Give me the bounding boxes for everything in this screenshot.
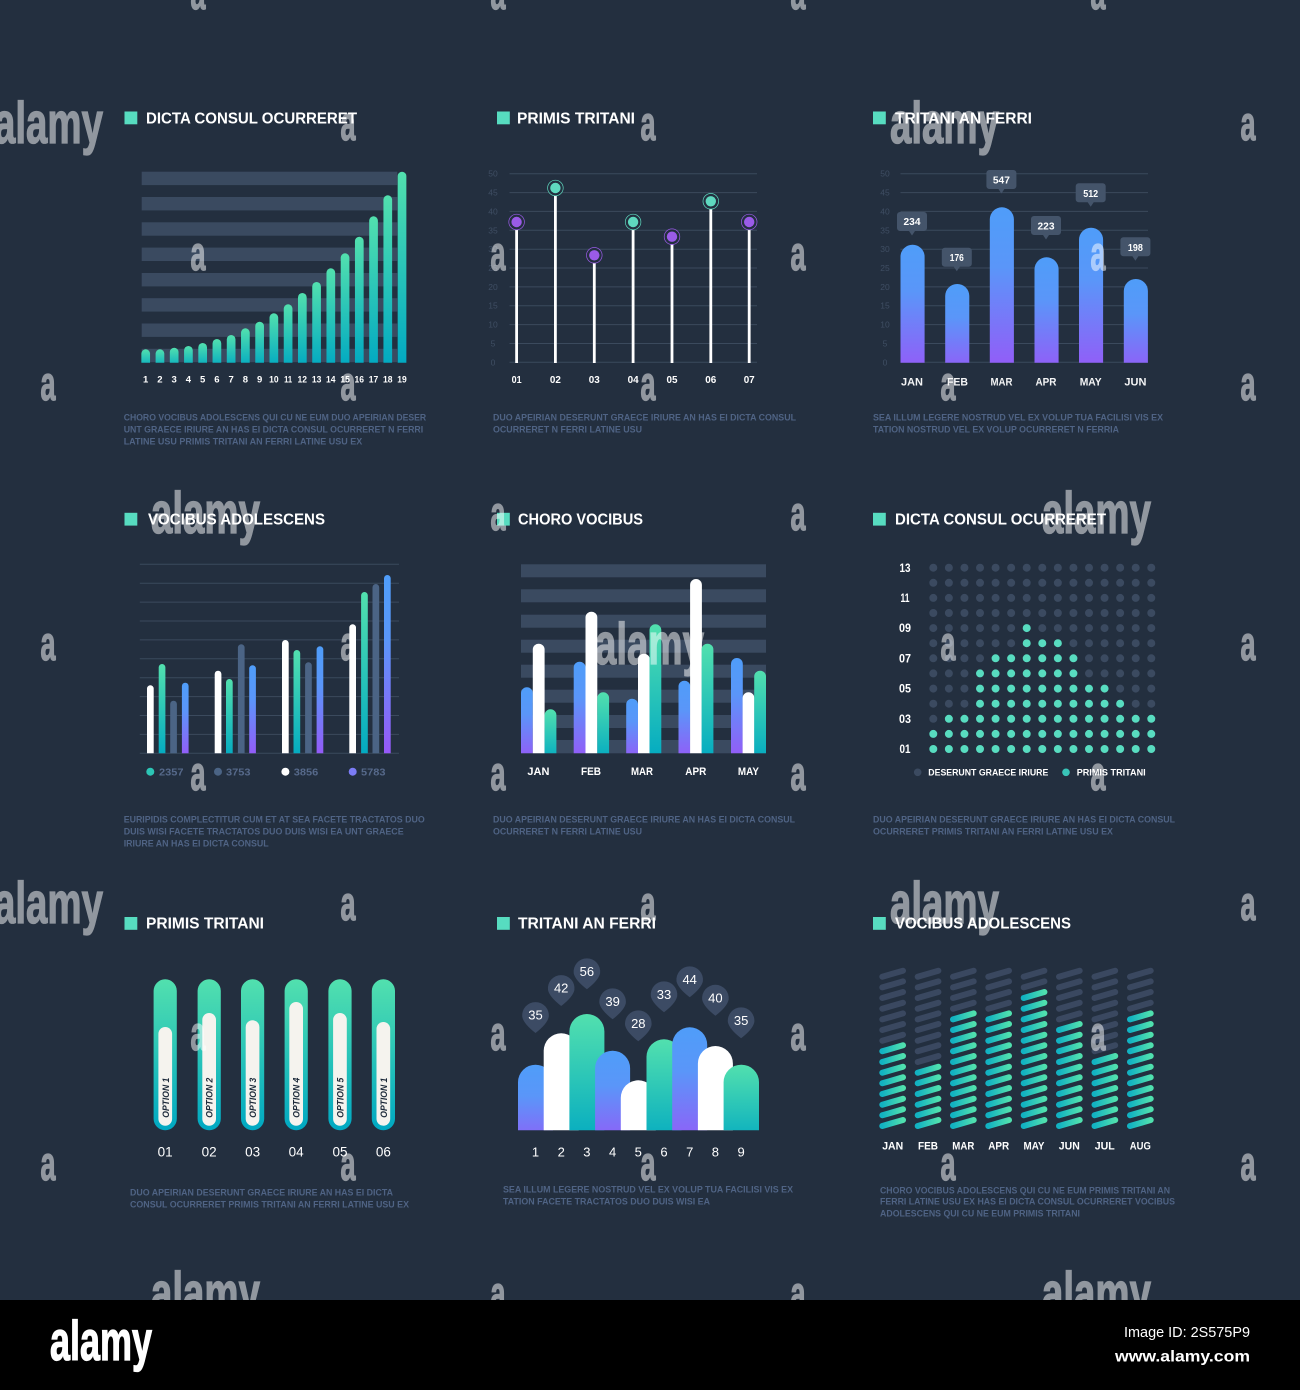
panel: primis tritani lollipop chart [488,110,796,436]
y axis labels: 45 [488,188,498,198]
axis labels: 10 [269,375,279,386]
option labels [161,1077,390,1118]
bar chart [521,579,766,764]
y axis labels: 5 [883,338,888,348]
watermark overlay: a [340,618,356,671]
y axis labels: 10 [880,320,890,330]
month labels: JUN [1059,1141,1080,1153]
watermark overlay: a [1240,878,1256,931]
segment column mar [953,971,974,1126]
y axis labels: 35 [488,225,498,235]
axis labels: 8 [712,1144,719,1159]
grid lines [900,174,1148,362]
watermark overlay: a [490,1008,506,1061]
panel: tritani an ferri overlapping arches [497,916,794,1208]
watermark overlay: a [40,358,56,411]
description: OCURRERET N FERRI LATINE USU [493,424,642,436]
watermark overlay: a [790,228,806,281]
option labels: OPTION 5 [336,1077,346,1118]
y axis labels: 25 [488,263,498,273]
y axis labels: 50 [488,169,498,179]
month labels: FEB [918,1141,938,1153]
option labels: OPTION 1 [379,1078,390,1118]
description: DUO APEIRIAN DESERUNT GRAECE IRIURE AN HAS EI DICTA [130,1188,393,1198]
month labels [882,1141,1151,1153]
month labels: AUG [1130,1141,1151,1153]
description: LATINE USU PRIMIS TRITANI AN FERRI LATINE USU EX [124,436,363,448]
description: EURIPIDIS COMPLECTITUR CUM ET AT SEA FACETE TRACTATOS DUO [124,814,425,826]
watermark overlay: a [940,358,956,411]
watermark overlay: a [340,878,356,931]
axis labels: 02 [202,1144,217,1160]
axis labels: 3 [172,375,177,386]
y axis labels: 15 [488,301,498,311]
y axis labels: 10 [488,320,498,330]
watermark overlay: a [490,1268,506,1321]
description: TATION FACETE TRACTATOS DUO DUIS WISI EA [503,1196,710,1208]
y axis labels: 40 [880,206,890,216]
y axis labels: 40 [488,206,498,216]
pin values: 42 [554,981,568,996]
axis labels: 6 [660,1144,668,1159]
axis labels: 07 [744,374,755,386]
segment column apr [988,971,1009,1126]
month labels: JAN [882,1141,903,1153]
background stripes [142,172,397,362]
description: CONSUL OCURRERET PRIMIS TRITANI AN FERRI LATINE USU EX [130,1200,410,1210]
description: IRIURE AN HAS EI DICTA CONSUL [124,838,269,850]
y axis labels: 30 [488,244,498,254]
axis labels: 5 [635,1144,642,1159]
axis labels: 9 [257,375,262,386]
description [493,412,796,436]
pin values: 39 [605,994,620,1009]
y axis labels: 03 [899,714,911,726]
watermark overlay: a [1240,618,1256,671]
axis labels: 06 [376,1144,391,1160]
bar chart [141,172,406,369]
heading: TRITANI AN FERRI [518,916,656,932]
callout values [904,175,1143,264]
watermark overlay: a [1240,1138,1256,1191]
month labels [527,766,759,778]
panel: tritani an ferri monthly bars [873,110,1164,436]
axis labels: 06 [705,374,716,386]
capsule tracks [154,979,395,1130]
heading: VOCIBUS ADOLESCENS [895,916,1071,932]
y axis labels: 25 [880,263,890,273]
axis labels: 11 [284,375,293,386]
legend marker [873,112,886,124]
description: TATION NOSTRUD VEL EX VOLUP OCURRERET N FERRIA [873,424,1119,436]
callout values: 198 [1128,243,1143,254]
callout values: 234 [904,217,921,228]
description: OCURRERET PRIMIS TRITANI AN FERRI LATINE USU EX [873,826,1114,838]
description [873,814,1175,838]
month labels: MAR [990,377,1013,389]
y axis labels: 13 [900,563,910,575]
axis labels [532,1144,745,1159]
description [873,412,1164,436]
watermark overlay: a [490,488,506,541]
month labels: MAR [631,766,653,778]
axis labels: 8 [243,375,248,386]
panel: vocibus adolescens grouped thin bars [124,512,425,850]
y axis labels: 50 [880,169,890,179]
watermark overlay: a [1240,98,1256,151]
description [493,814,795,838]
axis labels: 17 [369,375,378,386]
legend marker [124,513,137,526]
watermark overlay: a [1240,358,1256,411]
axis labels: 14 [326,375,336,386]
segment column jul [1094,971,1115,1126]
y axis labels [880,169,890,367]
y axis labels: 20 [488,282,498,292]
y axis labels: 11 [900,593,910,605]
axis labels: 16 [355,375,364,386]
axis labels: 02 [550,374,561,386]
axis labels: 13 [312,375,321,386]
watermark overlay: a [640,878,656,931]
month labels: MAY [738,766,759,778]
watermark overlay: a [40,618,56,671]
legend: 3856 [294,766,318,778]
segment column feb [918,971,938,1126]
axis labels: 03 [245,1144,260,1160]
axis labels: 05 [332,1144,348,1160]
legend marker [124,112,137,124]
bar chart [900,207,1148,379]
watermark overlay: a [790,748,806,801]
option labels: OPTION 3 [248,1077,259,1118]
panel: dicta consul ocurreret stepped bars [124,110,426,448]
y axis labels: 45 [880,188,890,198]
watermark overlay: a [1090,228,1106,281]
empty dots [933,568,1152,719]
axis labels: 19 [397,375,407,386]
footer logo: alamy [50,1309,152,1372]
description: UNT GRAECE IRIURE AN HAS EI DICTA CONSUL OCURRERET N FERRI [124,424,423,436]
stems [517,192,749,363]
watermark overlay: a [340,1138,356,1191]
description: DUIS WISI FACETE TRACTATOS DUO DUIS WISI EA UNT GRAECE [124,826,404,838]
axis labels [143,375,407,386]
axis labels: 2 [558,1144,565,1159]
month labels: JAN [527,766,549,778]
watermark overlay: alamy [890,871,999,936]
watermark overlay: a [790,1008,806,1061]
watermark overlay: a [190,228,206,281]
description: DUO APEIRIAN DESERUNT GRAECE IRIURE AN HAS EI DICTA CONSUL [873,814,1175,826]
axis labels: 7 [686,1144,693,1159]
option labels: OPTION 4 [292,1077,302,1118]
heading: PRIMIS TRITANI [517,110,635,127]
grid lines [140,564,399,753]
description: SEA ILLUM LEGERE NOSTRUD VEL EX VOLUP TUA FACILISI VIS EX [873,412,1164,424]
y axis labels: 0 [491,357,496,367]
legend [914,768,1146,779]
watermark overlay: a [490,748,506,801]
panel: primis tritani capsule gauges [124,916,410,1210]
description: DUO APEIRIAN DESERUNT GRAECE IRIURE AN HAS EI DICTA CONSUL [493,412,796,424]
legend marker [124,917,137,930]
watermark overlay: a [490,228,506,281]
axis labels: 05 [666,374,678,386]
legend marker [497,917,510,930]
image id: Image ID: 2S575P9 [1124,1324,1250,1341]
axis labels [512,374,755,386]
month labels: APR [685,766,706,778]
axis labels: 12 [298,375,307,386]
pin values: 44 [682,972,697,987]
segment column jun [1059,971,1080,1126]
month labels: MAY [1080,377,1102,389]
description: FERRI LATINE USU EX HAS EI DICTA CONSUL OCURRERET VOCIBUS [880,1196,1175,1208]
bar chart [147,575,391,761]
capsule fills [158,1002,390,1126]
y axis labels: 35 [880,225,890,235]
legend: 5783 [361,766,386,778]
heading: DICTA CONSUL OCURRERET [146,110,357,127]
option labels: OPTION 2 [204,1077,216,1118]
y axis labels: 30 [880,244,890,254]
y axis labels: 05 [899,684,912,696]
panel: vocibus adolescens slanted segment bars [873,916,1175,1220]
pin values: 35 [734,1013,748,1028]
description: CHORO VOCIBUS ADOLESCENS QUI CU NE EUM PRIMIS TRITANI AN [880,1186,1170,1196]
filled dots [933,628,1152,749]
axis labels: 04 [628,374,639,386]
month labels: FEB [947,377,968,389]
axis labels [158,1144,391,1160]
month labels: MAY [1024,1141,1045,1153]
axis labels: 1 [532,1144,539,1159]
pin values: 56 [580,964,594,979]
pin values: 33 [657,987,671,1002]
axis labels: 18 [383,375,393,386]
y axis labels [899,563,912,756]
y axis labels: 5 [491,338,496,348]
legend: 3753 [226,766,251,778]
description [503,1184,794,1208]
axis labels: 7 [228,375,234,386]
watermark overlay: a [940,1138,956,1191]
axis labels: 01 [158,1144,173,1160]
axis labels: 4 [609,1144,616,1159]
segment column jan [882,971,903,1126]
axis labels: 4 [186,375,192,386]
month labels: JUN [1124,377,1146,389]
watermark overlay: a [640,98,656,151]
description [124,814,425,850]
axis labels: 9 [737,1144,745,1159]
month labels: APR [1036,377,1057,389]
axis labels: 3 [583,1144,591,1159]
watermark overlay: a [790,1268,806,1321]
y axis labels: 09 [899,623,911,635]
callout values: 547 [993,175,1010,186]
panel: choro vocibus triple bars [493,512,795,838]
watermark overlay: alamy [595,612,704,677]
value callouts [897,170,1150,271]
watermark overlay: a [340,98,356,151]
axis labels: 01 [512,374,522,386]
watermark overlay: a [940,618,956,671]
month labels: JAN [901,377,923,389]
axis labels: 1 [143,375,149,386]
description: OCURRERET N FERRI LATINE USU [493,826,642,838]
month labels [901,377,1146,389]
y axis labels: 20 [880,282,890,292]
axis labels: 15 [340,375,350,386]
watermark overlay: a [1090,1008,1106,1061]
month labels: MAR [952,1141,974,1153]
watermark overlay: a [190,1008,206,1061]
watermark overlay: alamy [1042,481,1151,546]
background stripes [521,564,766,753]
pin values: 28 [631,1016,646,1031]
heading: DICTA CONSUL OCURRERET [895,512,1106,528]
legend marker [873,513,886,526]
markers [509,180,757,263]
legend marker [497,513,510,526]
watermark overlay: a [640,1138,656,1191]
legend marker [873,917,886,930]
y axis labels: 15 [880,301,890,311]
watermark overlay: alamy [1042,1261,1151,1326]
panel: dicta consul ocurreret dot matrix [873,512,1175,838]
arch chart [518,1014,759,1130]
y axis labels [488,169,498,367]
axis labels: 03 [589,374,600,386]
legend: PRIMIS TRITANI [1077,768,1146,779]
description [130,1188,410,1210]
watermark overlay: a [190,748,206,801]
segment column may [1024,971,1044,1126]
watermark overlay: alamy [151,1261,260,1326]
y axis labels: 01 [900,744,911,756]
footer bar [0,1300,1300,1390]
description: CHORO VOCIBUS ADOLESCENS QUI CU NE EUM DUO APEIRIAN DESER [124,412,426,424]
watermark overlay: a [40,1138,56,1191]
heading: PRIMIS TRITANI [146,916,264,932]
pin values [528,964,748,1031]
description: ADOLESCENS QUI CU NE EUM PRIMIS TRITANI [880,1208,1080,1220]
description: DUO APEIRIAN DESERUNT GRAECE IRIURE AN HAS EI DICTA CONSUL [493,814,795,826]
y axis labels: 07 [899,653,911,665]
pin values: 35 [528,1008,543,1023]
description [880,1186,1175,1220]
axis labels: 5 [200,375,206,386]
legend: DESERUNT GRAECE IRIURE [928,768,1048,779]
month labels: APR [988,1141,1009,1153]
axis labels: 04 [289,1144,304,1160]
heading: CHORO VOCIBUS [518,512,643,528]
watermark overlay: a [1090,748,1106,801]
legend [146,766,386,778]
watermark overlay: a [340,358,356,411]
heading: TRITANI AN FERRI [895,110,1032,127]
legend marker [497,112,510,124]
heading: VOCIBUS ADOLESCENS [148,512,325,528]
month labels: FEB [581,766,601,778]
legend: 2357 [159,766,184,778]
watermark overlay: alamy [890,91,999,156]
watermark overlay: a [640,358,656,411]
value pins [522,958,754,1041]
axis labels: 6 [214,375,220,386]
month labels: JUL [1095,1141,1115,1153]
grid lines [510,174,757,362]
segment column aug [1130,971,1151,1126]
callout values: 223 [1038,221,1055,232]
description [124,412,426,448]
callout values: 512 [1083,189,1099,200]
watermark overlay: a [790,488,806,541]
y axis labels: 0 [883,357,888,367]
callout values: 176 [950,253,964,264]
watermark overlay: alamy [151,481,260,546]
axis labels: 2 [157,375,163,386]
site url: www.alamy.com [1114,1348,1250,1366]
option labels: OPTION 1 [161,1078,172,1118]
description: SEA ILLUM LEGERE NOSTRUD VEL EX VOLUP TUA FACILISI VIS EX [503,1184,794,1196]
pin values: 40 [708,990,723,1005]
